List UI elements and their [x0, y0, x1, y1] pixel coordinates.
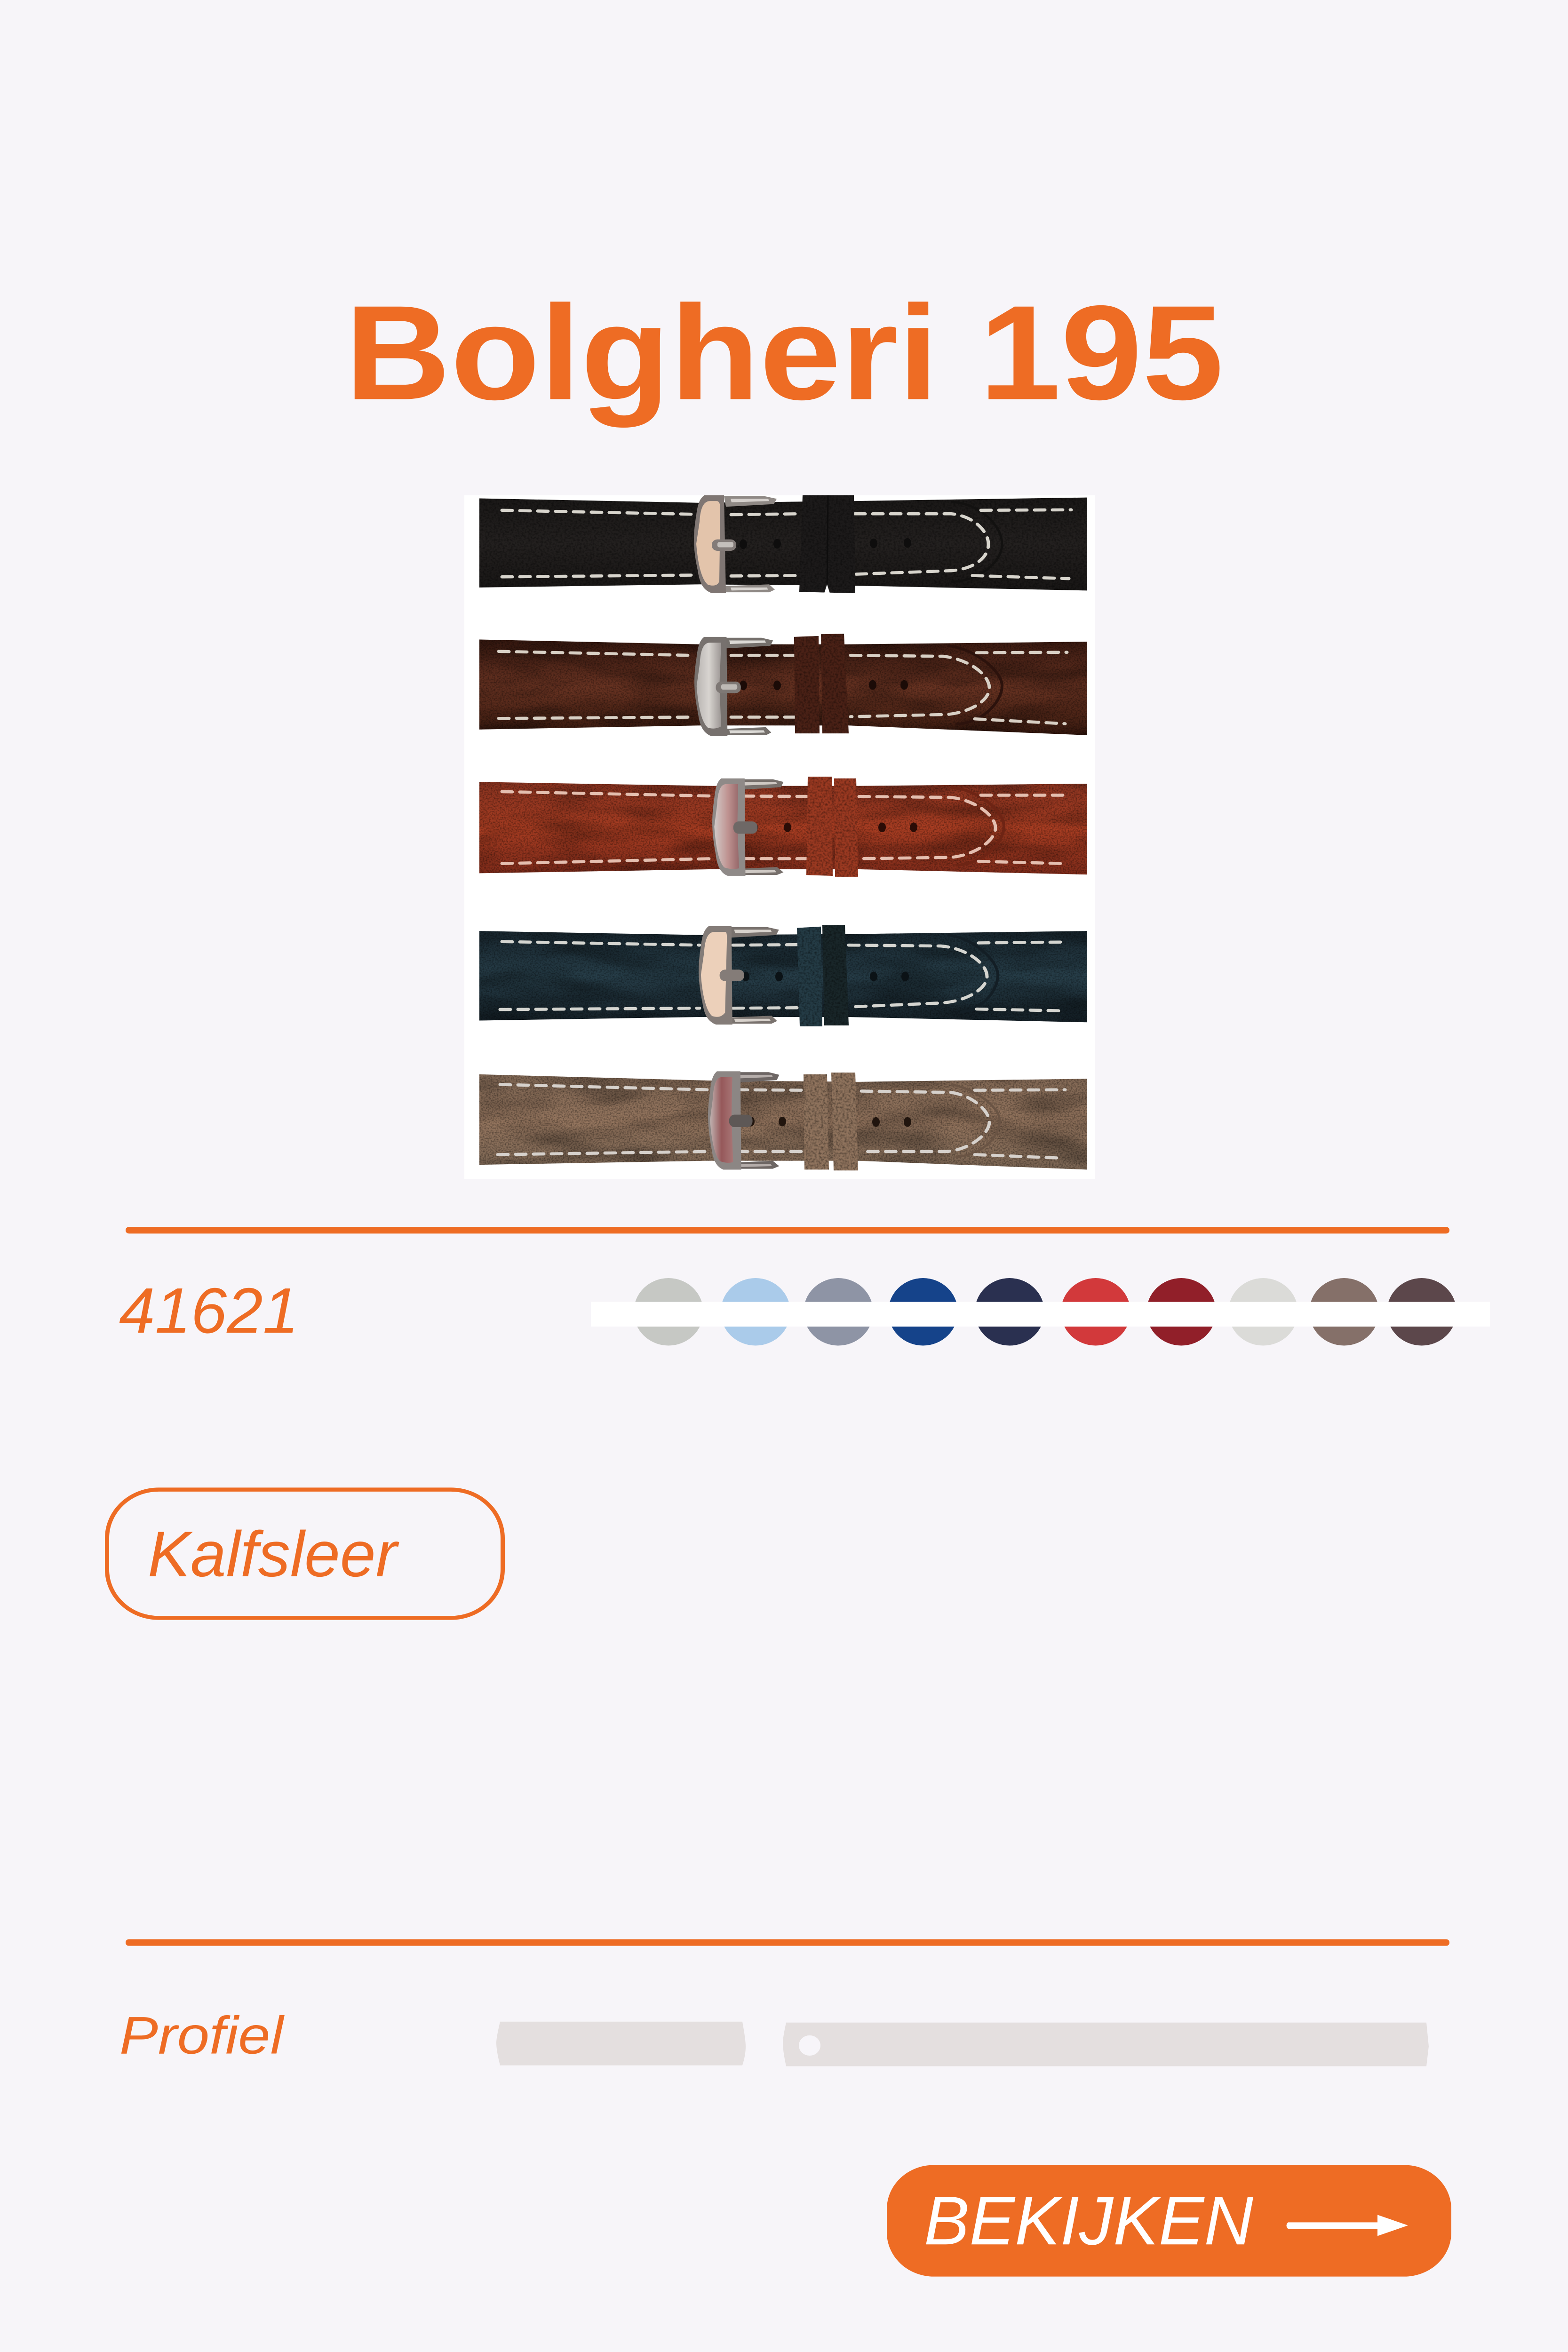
- top divider rule: [126, 1227, 1449, 1233]
- icon: arrow: [1286, 2215, 1408, 2236]
- material tag: Kalfsleer: Kalfsleer: [148, 1518, 399, 1590]
- article number: 41621: [119, 1274, 299, 1346]
- colour swatches: [591, 1278, 1490, 1345]
- button: Bekijken: [887, 2165, 1451, 2277]
- product photo: five leather watch straps: [464, 495, 1095, 1179]
- title: Bolgheri 195: [345, 277, 1224, 429]
- bottom divider rule: [126, 1939, 1449, 1946]
- button: Bekijken: BEKIJKEN: [924, 2183, 1254, 2259]
- material tag: Kalfsleer: [107, 1490, 502, 1618]
- strap: red-brown: [479, 777, 1087, 877]
- strap profile diagram: [496, 2022, 1429, 2066]
- strap: black: [479, 495, 1087, 593]
- strap: navy: [479, 925, 1087, 1026]
- strap: taupe: [479, 1071, 1087, 1170]
- profile label: Profiel: [119, 2006, 285, 2065]
- strap: dark brown: [479, 634, 1087, 736]
